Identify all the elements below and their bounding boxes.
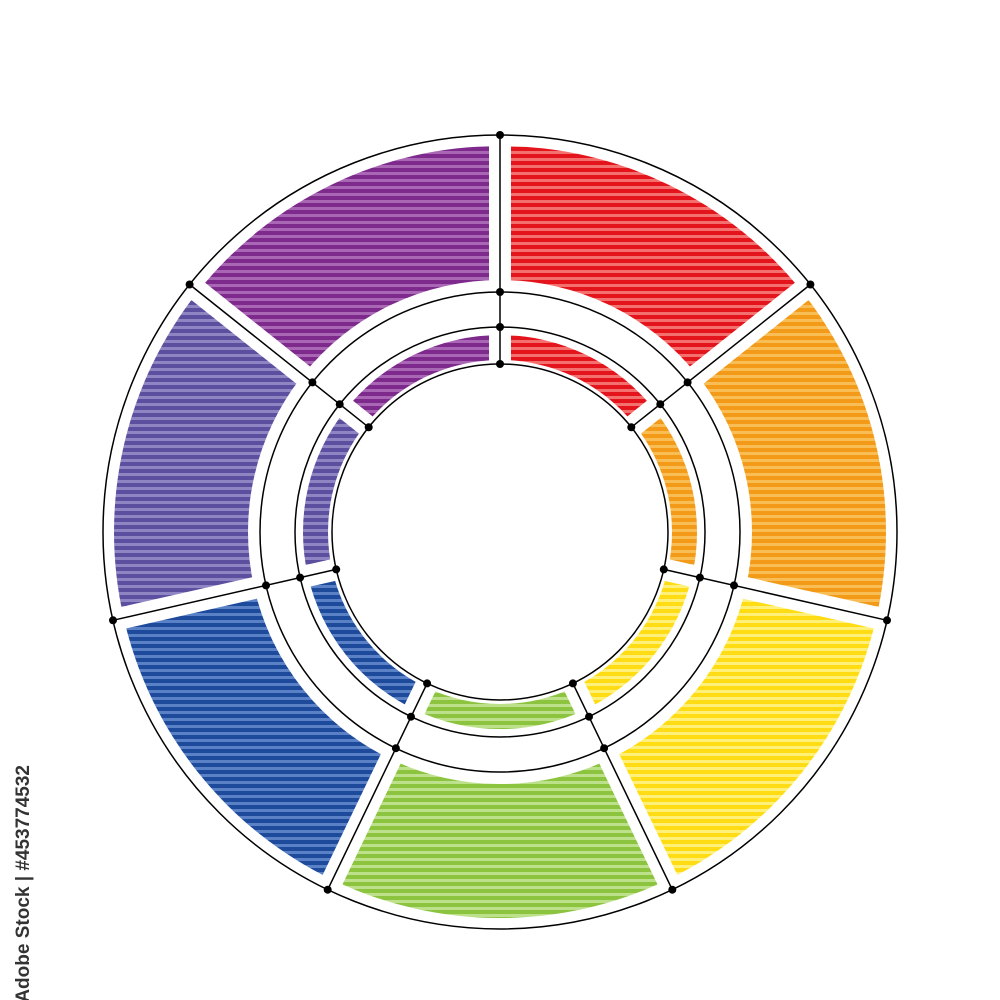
outer ring circle bbox=[103, 135, 897, 929]
segment: green inner bbox=[414, 687, 586, 729]
inner colored band bbox=[303, 335, 697, 729]
segment: orange inner bbox=[634, 409, 697, 576]
segment: red outer bbox=[500, 146, 802, 375]
junction dots bbox=[109, 131, 891, 894]
segment: blue inner bbox=[308, 570, 425, 710]
segment: green outer bbox=[332, 759, 668, 918]
white gaps between segments bbox=[118, 140, 882, 885]
segment: yellow outer bbox=[609, 588, 876, 880]
segment: orange outer bbox=[697, 291, 886, 618]
segment: purple inner bbox=[346, 335, 500, 425]
segment: blue outer bbox=[124, 588, 391, 880]
segment: indigo inner bbox=[303, 409, 366, 576]
watermark id text: Adobe Stock | #453774532 bbox=[13, 765, 34, 1000]
ring circles bbox=[260, 292, 740, 772]
segment: red inner bbox=[500, 335, 654, 425]
divider lines bbox=[113, 135, 887, 890]
segment: yellow inner bbox=[575, 570, 692, 710]
segment: purple outer bbox=[198, 146, 500, 375]
segment: indigo outer bbox=[114, 291, 303, 618]
outer colored band bbox=[114, 146, 886, 918]
